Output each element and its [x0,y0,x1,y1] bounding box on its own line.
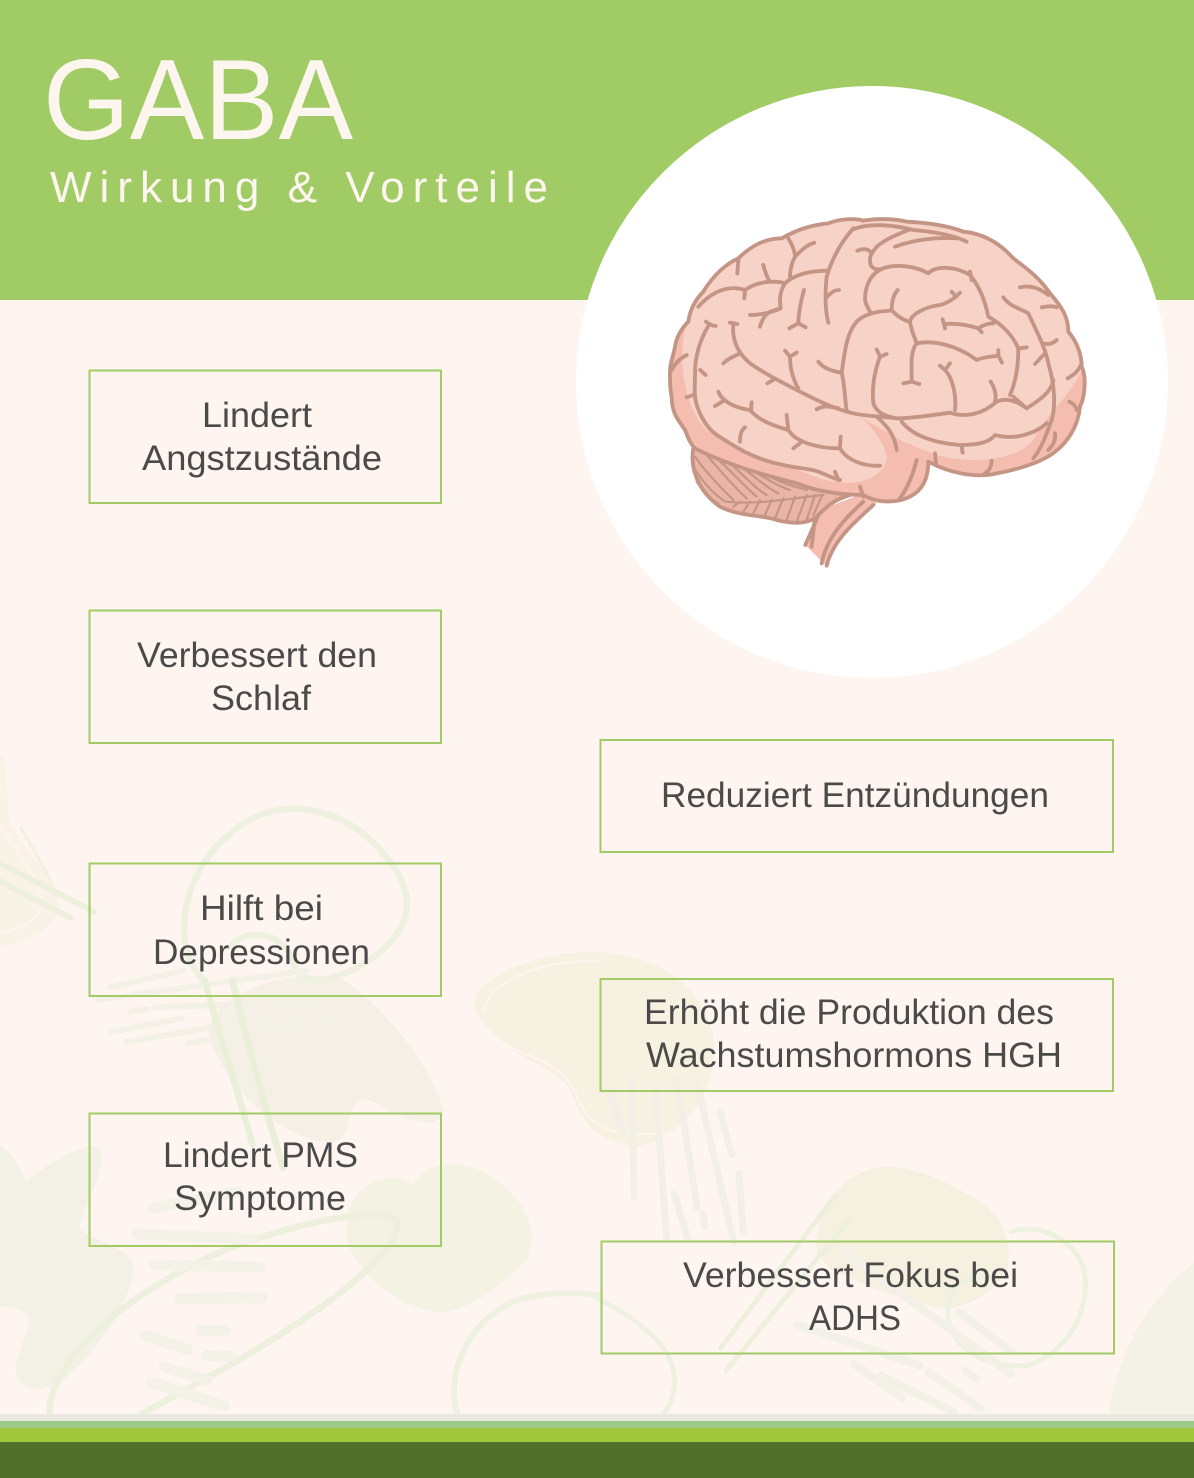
benefit box: Verbessert den Schlaf [90,610,441,743]
benefit box: Lindert PMS Symptome: Symptome [174,1179,346,1218]
benefit box: Lindert Angstzustände: Lindert [202,396,312,435]
icon: brain [670,219,1085,566]
title: GABA [43,37,353,164]
footer stripes [0,1414,1194,1478]
benefit box: Verbessert Fokus bei ADHS: ADHS [809,1299,901,1338]
benefit box: Verbessert den Schlaf: Verbessert den [137,636,377,675]
benefit box: Verbessert den Schlaf: Schlaf [211,679,311,718]
benefit box: Hilft bei Depressionen: Hilft bei [200,889,323,928]
benefit box: Erhöht die Produktion des Wachstumshormons HGH: Erhöht die Produktion des [644,993,1054,1032]
benefit box: Lindert PMS Symptome: Lindert PMS [163,1136,358,1175]
benefit box: Lindert PMS Symptome [90,1114,441,1246]
cerebrum base [670,219,1085,501]
benefit box: Lindert Angstzustände: Angstzustände [142,439,382,478]
subtitle: Wirkung & Vorteile [50,163,548,212]
sulci [672,225,1082,498]
benefit box: Erhöht die Produktion des Wachstumshormons HGH: Wachstumshormons HGH [646,1036,1062,1075]
benefit box: Verbessert Fokus bei ADHS: Verbessert Fokus bei [683,1256,1018,1295]
benefit box: Reduziert Entzündungen [600,740,1113,852]
cerebrum highlight [682,219,1082,483]
benefit box: Erhöht die Produktion des Wachstumshormons HGH [600,979,1113,1091]
benefit box: Lindert Angstzustände [90,370,441,503]
benefit box: Hilft bei Depressionen: Depressionen [153,933,370,972]
benefit box: Hilft bei Depressionen [90,864,441,996]
benefit box: Reduziert Entzündungen: Reduziert Entzündungen [661,776,1049,815]
white circle [576,86,1168,678]
cerebellum [693,448,850,523]
header band [0,0,1194,300]
benefit box: Verbessert Fokus bei ADHS [602,1242,1114,1354]
cerebrum outline [670,219,1085,501]
brain stem [805,493,877,566]
